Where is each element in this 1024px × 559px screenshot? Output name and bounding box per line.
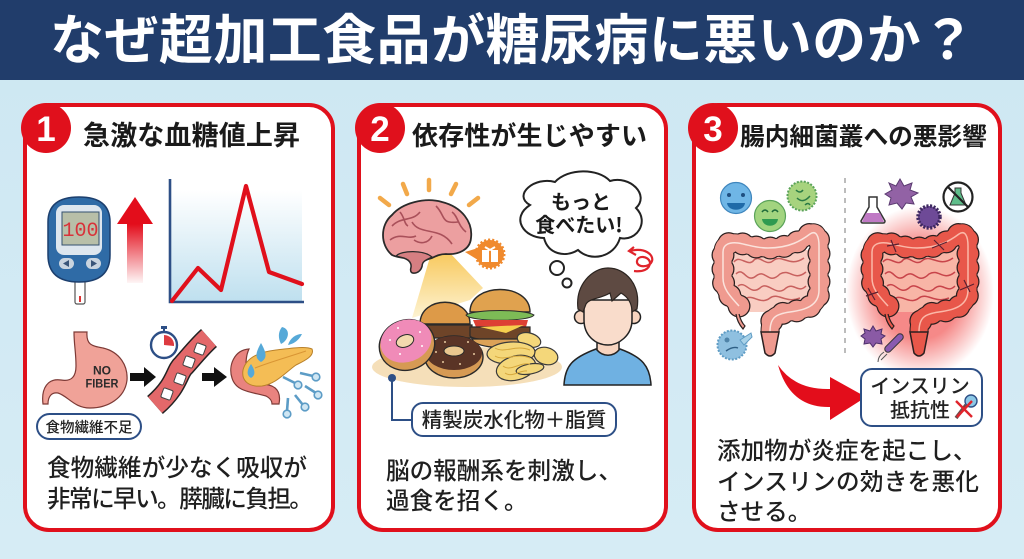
label: insulin resistance (861, 369, 982, 426)
body text 1: 非常に早い。膵臓に負担。 (47, 480, 313, 514)
body text 3 (717, 432, 979, 527)
thought bubble (520, 171, 642, 288)
inflammation glow (846, 206, 994, 378)
icon: glucose meter (48, 197, 110, 304)
icon: healthy bacteria (720, 182, 816, 232)
back burger (420, 302, 472, 338)
body text 1 (47, 449, 313, 514)
icon: stopwatch (151, 326, 177, 358)
icon: blood vessel with sugar cubes (155, 338, 209, 405)
label: insulin resistance: 抵抗性 (890, 394, 950, 423)
leader line from food (388, 374, 412, 420)
number badge 1: 1 (36, 110, 56, 149)
icon: person (564, 268, 651, 385)
body text 2 (386, 452, 622, 516)
icon: stomach (43, 332, 127, 408)
icon: brain with rays (380, 180, 478, 273)
body text 2: 過食を招く。 (386, 482, 528, 516)
heading 2: 依存性が生じやすい (412, 116, 647, 153)
yellow light beam (412, 253, 483, 318)
number badge 3 (688, 103, 738, 153)
divider (844, 178, 846, 358)
icon: glucose meter: 100 (62, 220, 99, 243)
icon: junk food pile (372, 290, 562, 387)
icon: no additives sign (944, 182, 972, 212)
icon: strained pancreas (231, 327, 322, 418)
number badge 2: 2 (370, 110, 390, 149)
icon: broken key (956, 395, 977, 418)
line chart: blood sugar spike (170, 179, 304, 302)
panel 2: addictive (355, 103, 666, 530)
icon: red swirl (629, 247, 652, 271)
icon: reward gift badge (465, 240, 504, 268)
number badge 3: 3 (703, 110, 723, 149)
panel 3: gut bacteria (688, 103, 1000, 530)
icon: stomach: NO (93, 364, 111, 378)
icon: healthy colon (723, 233, 819, 356)
chips (486, 330, 560, 385)
label: lack of fibre: 食物繊維不足 (46, 416, 133, 438)
label: refined carbs + fat: 精製炭水化物＋脂質 (422, 403, 606, 433)
panel 1: rapid blood sugar rise (21, 103, 333, 530)
number badge 2 (355, 103, 405, 153)
icon: inflamed colon (866, 233, 974, 356)
arrow (130, 367, 156, 387)
body text 3: 添加物が炎症を起こし、 (717, 432, 977, 466)
burger (466, 290, 534, 347)
arrow (202, 367, 227, 387)
body text 2: 脳の報酬系を刺激し、 (386, 452, 622, 486)
heading 1: 急激な血糖値上昇 (83, 114, 300, 153)
body text 1: 食物繊維が少なく吸収が (47, 449, 307, 483)
icon: stomach: FIBER (86, 376, 119, 390)
curved red arrow (778, 365, 866, 420)
heading 3: 腸内細菌叢への悪影響 (740, 117, 987, 153)
body text 3: インスリンの効きを悪化 (717, 463, 979, 497)
chocolate donut (425, 336, 483, 378)
label: insulin resistance: インスリン (870, 370, 970, 399)
icon: harmful viruses (861, 179, 940, 362)
pink donut (372, 312, 442, 378)
thought bubble: 食べたい! (535, 209, 623, 238)
icon: additive flask (861, 197, 885, 223)
icon: friendly bacterium (718, 330, 752, 360)
number badge 1 (21, 103, 71, 153)
body text 3: させる。 (717, 493, 811, 527)
thought bubble: もっと (551, 186, 611, 215)
icon: red up arrow (117, 197, 153, 283)
